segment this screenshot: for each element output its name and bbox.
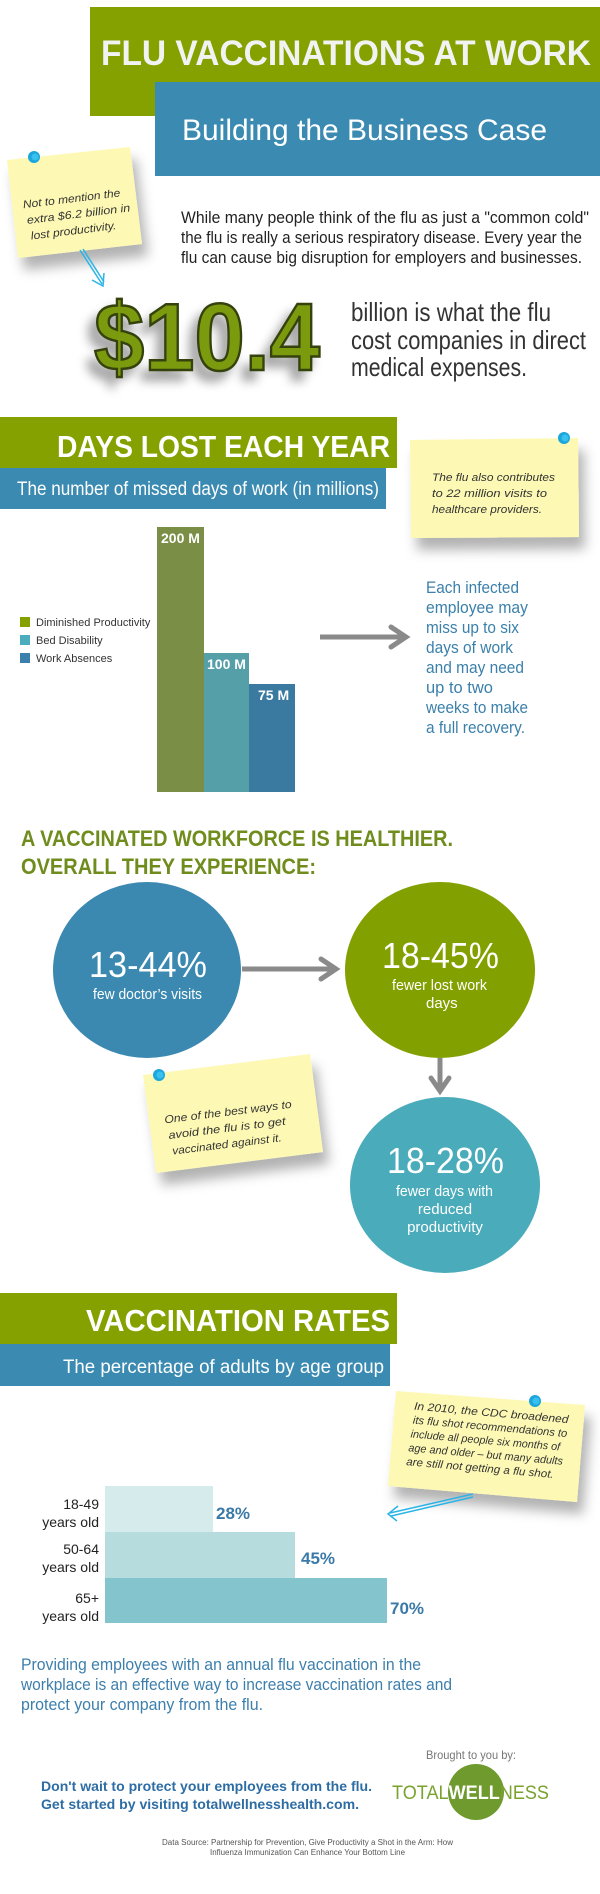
sticky note: best way: vaccinated against it. <box>172 1132 282 1158</box>
call to action <box>41 1778 372 1812</box>
bar chart: vaccination rates: 45% <box>301 1549 335 1568</box>
arrow: to recovery text <box>320 627 406 647</box>
sticky note: lost productivity <box>7 147 142 258</box>
bar chart: vaccination rates: 18-49 <box>63 1496 99 1512</box>
sticky note: CDC 2010 <box>388 1391 585 1502</box>
circle: doctor visits: 13-44% <box>89 944 207 985</box>
sticky note: CDC 2010: are still not getting a flu shot. <box>406 1456 554 1481</box>
sticky note: healthcare visits <box>410 432 579 538</box>
bar chart: vaccination rates: 65+ <box>75 1590 99 1606</box>
sticky note: best way <box>143 1054 323 1173</box>
sticky note: CDC 2010: its flu shot recommendations to <box>412 1415 568 1440</box>
arrow: note to figure <box>80 249 104 286</box>
sticky note: CDC 2010: include all people six months of <box>410 1428 562 1454</box>
closing paragraph: workplace is an effective way to increase vaccination rates and <box>20 1675 452 1694</box>
cost description <box>351 297 587 382</box>
closing paragraph: Providing employees with an annual flu vaccination in the <box>21 1655 421 1674</box>
sticky note: lost productivity: Not to mention the <box>22 187 121 211</box>
heading: vaccinated workforce: A VACCINATED WORKFORCE IS HEALTHIER. <box>21 826 453 851</box>
circle: lost work days: days <box>426 995 458 1012</box>
recovery text: employee may <box>426 598 528 617</box>
bar chart: vaccination rates: 50-64 <box>63 1541 99 1557</box>
sticky note: CDC 2010: age and older – but many adults <box>408 1442 564 1468</box>
sticky note: lost productivity: lost productivity. <box>30 220 117 243</box>
heading: vaccinated workforce: OVERALL THEY EXPERIENCE: <box>21 854 316 879</box>
closing paragraph: protect your company from the flu. <box>21 1695 263 1714</box>
subtitle bar: Building the Business Case <box>182 114 547 147</box>
arrow: note to chart <box>388 1494 473 1521</box>
sticky note: lost productivity: extra $6.2 billion in <box>26 202 131 227</box>
recovery text: and may need <box>426 658 524 677</box>
bar chart: vaccination rates: 70% <box>390 1599 424 1618</box>
heading: vaccination rates: VACCINATION RATES <box>86 1303 390 1338</box>
subheading: missed days <box>0 468 386 509</box>
recovery text: Each infected <box>426 578 519 597</box>
bar chart: days lost: 200 M <box>161 530 200 546</box>
subheading: by age group: The percentage of adults by age group <box>63 1357 384 1378</box>
subtitle bar <box>155 82 600 176</box>
legend: Diminished Productivity <box>36 617 151 629</box>
recovery text: days of work <box>426 638 513 657</box>
title bar <box>90 7 600 116</box>
sticky note: healthcare visits: healthcare providers. <box>432 504 542 516</box>
bar chart: vaccination rates <box>42 1486 424 1624</box>
circle: reduced productivity: fewer days with <box>396 1183 493 1200</box>
arrow: right <box>242 959 336 979</box>
heading: days lost: DAYS LOST EACH YEAR <box>57 429 390 464</box>
arrow: down <box>431 1058 449 1091</box>
circle: lost work days <box>345 882 535 1058</box>
recovery text: a full recovery. <box>426 718 525 737</box>
recovery text <box>425 578 528 737</box>
closing paragraph <box>20 1655 452 1714</box>
data source <box>162 1838 453 1857</box>
circle: lost work days: fewer lost work <box>392 977 487 994</box>
bar chart: vaccination rates: years old <box>42 1514 99 1530</box>
big number $10.4: $10.4 <box>94 284 320 391</box>
bar chart: vaccination rates: years old <box>42 1559 99 1575</box>
cost description: medical expenses. <box>351 352 527 382</box>
bar chart: days lost <box>157 527 295 792</box>
heading: vaccination rates <box>0 1293 397 1344</box>
intro paragraph <box>181 208 589 267</box>
logo: total wellness <box>392 1764 549 1820</box>
sticky note: CDC 2010: In 2010, the CDC broadened <box>414 1401 570 1426</box>
bar chart: vaccination rates: years old <box>42 1608 99 1624</box>
call to action: Get started by visiting totalwellnesshealth.com. <box>41 1796 359 1812</box>
circle: doctor visits: few doctor’s visits <box>93 986 202 1003</box>
title bar: FLU VACCINATIONS AT WORK <box>101 34 591 73</box>
call to action: Don't wait to protect your employees from the flu. <box>41 1778 372 1794</box>
bar chart: days lost: 75 M <box>258 687 289 703</box>
heading: days lost <box>0 417 397 468</box>
sticky note: healthcare visits: to 22 million visits to <box>432 488 547 500</box>
subheading: by age group <box>0 1344 390 1386</box>
subheading: missed days: The number of missed days of work (in millions) <box>17 479 379 500</box>
recovery text: miss up to six <box>426 618 519 637</box>
circle: reduced productivity <box>350 1097 540 1273</box>
legend: Work Absences <box>36 653 113 665</box>
circle: doctor visits <box>53 882 241 1058</box>
circle: lost work days: 18-45% <box>382 935 499 976</box>
recovery text: up to two <box>426 678 493 697</box>
logo: total wellness: TOTALWELLNESS <box>392 1783 549 1804</box>
recovery text: weeks to make <box>425 698 528 717</box>
circle: reduced productivity: 18-28% <box>387 1140 504 1181</box>
sticky note: best way: One of the best ways to <box>164 1099 292 1126</box>
bar chart: days lost: 100 M <box>207 656 246 672</box>
circle: reduced productivity: productivity <box>407 1219 483 1236</box>
sticky note: healthcare visits: The flu also contributes <box>432 472 556 484</box>
legend <box>20 617 151 665</box>
cost description: billion is what the flu <box>351 297 551 327</box>
bar chart: vaccination rates: 28% <box>216 1504 250 1523</box>
sticky note: best way: avoid the flu is to get <box>168 1116 287 1142</box>
data source: Data Source: Partnership for Prevention, Give Productivity a Shot in the Arm: How <box>162 1838 453 1847</box>
heading: vaccinated workforce <box>21 826 453 879</box>
brought to you by: Brought to you by: <box>426 1748 516 1762</box>
circle: reduced productivity: reduced <box>418 1201 472 1218</box>
legend: Bed Disability <box>36 635 103 647</box>
data source: Influenza Immunization Can Enhance Your Bottom Line <box>210 1848 406 1857</box>
